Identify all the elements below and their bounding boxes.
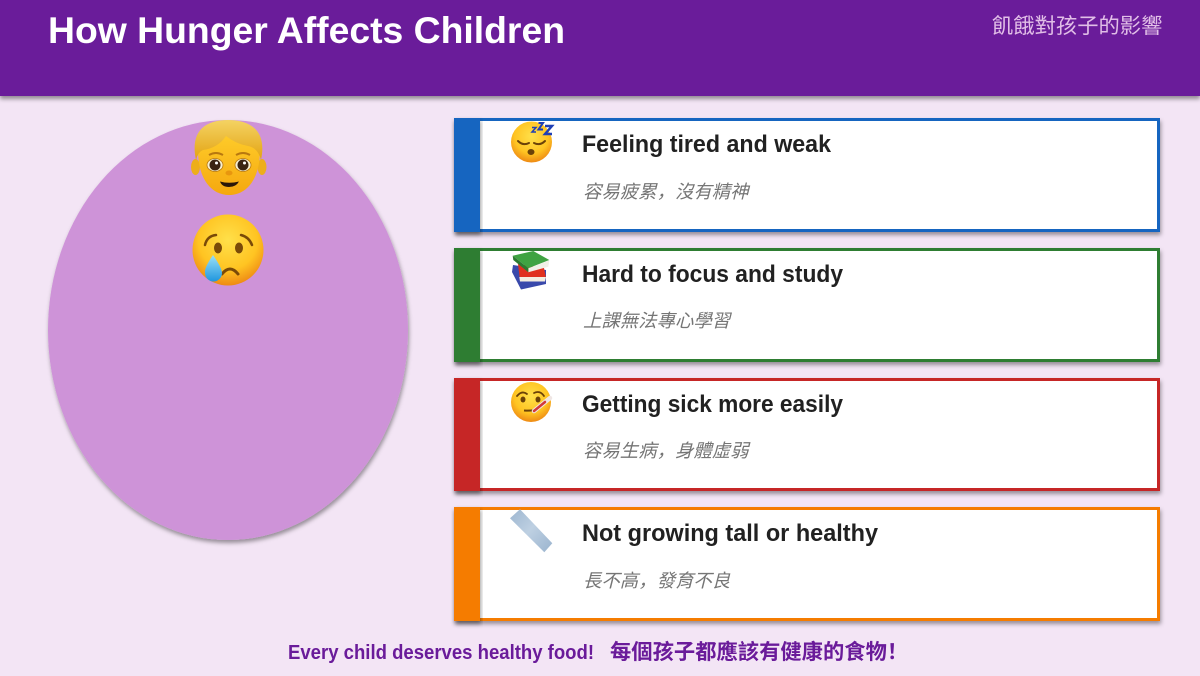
icon: sleeping face [511,122,552,162]
chinese description: 長不高，發育不良 [583,567,731,593]
footer message: Every child deserves healthy food! [288,642,594,664]
child illustration oval [48,120,408,540]
footer message: 每個孩子都應該有健康的食物！ [610,635,908,666]
chinese description: 上課無法專心學習 [583,310,733,331]
icon: crying face [192,214,264,286]
panel: hard to focus [454,248,1158,362]
heading: Hard to focus and study [582,261,844,288]
chinese subtitle: 飢餓對孩子的影響 [992,14,1162,38]
chinese description: 容易疲累，沒有精神 [583,178,751,204]
icon: ruler [510,509,552,552]
panel: getting sick [454,378,1158,491]
icon: stack of books [512,251,549,290]
heading: Feeling tired and weak [582,131,832,158]
heading: Getting sick more easily [582,391,844,418]
panel: feeling tired [454,118,1158,232]
title: How Hunger Affects Children [48,10,565,51]
icon: face with thermometer [511,382,551,422]
chinese description: 容易生病，身體虛弱 [583,437,751,463]
header band [0,0,1200,96]
heading: Not growing tall or healthy [582,520,879,547]
icon: boy face [191,120,266,195]
footer message [288,635,908,666]
panel: not growing [454,507,1158,621]
